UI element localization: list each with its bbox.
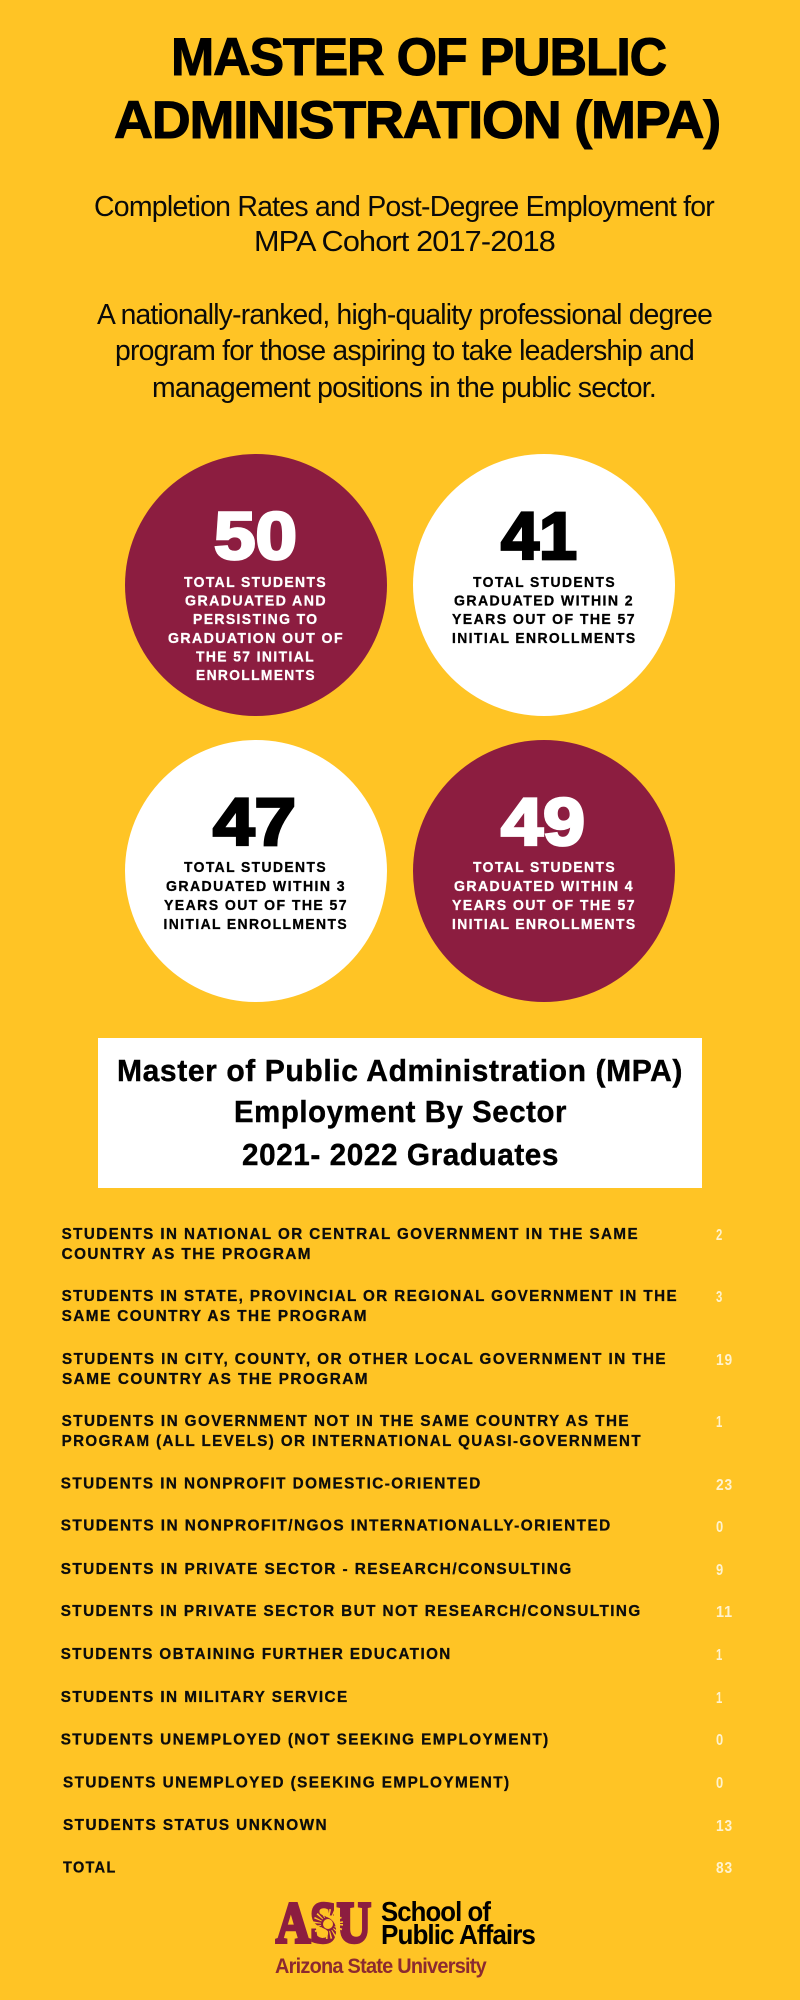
- row: nonprofit domestic: [61, 1476, 733, 1494]
- title: ADMINISTRATION (MPA): [114, 91, 720, 150]
- stat circle: 47 graduated within 3 years: TOTAL STUDENTS: [184, 859, 327, 876]
- program description: program for those aspiring to take leadership and: [115, 335, 694, 367]
- title: MASTER OF PUBLIC: [171, 28, 666, 87]
- stat circle: 50 graduated and persisting: GRADUATION OUT OF: [168, 630, 344, 647]
- employment table: [61, 1226, 733, 1877]
- row: total: TOTAL: [63, 1860, 117, 1876]
- stat circle: 50 graduated and persisting: GRADUATED AND: [185, 592, 327, 610]
- row: nonprofit domestic: 23: [716, 1477, 733, 1494]
- row: non-domestic government: 1: [716, 1414, 723, 1431]
- row: unemployed seeking: 0: [716, 1775, 724, 1792]
- logo: ASU School of Public Affairs: Public Affairs: [381, 1919, 535, 1950]
- panel: employment by sector heading: 2021- 2022 Graduates: [242, 1137, 559, 1172]
- program description: [97, 299, 712, 404]
- row: military: 1: [716, 1690, 723, 1707]
- row: non-domestic government: STUDENTS IN GOVERNMENT NOT IN THE SAME COUNTRY AS THE: [62, 1413, 630, 1430]
- stat circle: 47 graduated within 3 years: GRADUATED WITHIN 3: [166, 878, 346, 895]
- stat circle: 49 graduated within 4 years: [413, 740, 675, 1002]
- logo: ASU School of Public Affairs: [275, 1890, 535, 1978]
- row: state government: STUDENTS IN STATE, PROVINCIAL OR REGIONAL GOVERNMENT IN THE: [62, 1288, 678, 1305]
- row: total: 83: [716, 1860, 733, 1877]
- stat circle: 49 graduated within 4 years: 49: [501, 785, 585, 860]
- row: total: [63, 1860, 733, 1877]
- row: unemployed not seeking: 0: [716, 1732, 724, 1749]
- icon: ASU sunburst wordmark: ASU: [276, 1890, 371, 1955]
- row: national government: 2: [716, 1227, 723, 1244]
- row: national government: COUNTRY AS THE PROGRAM: [62, 1246, 312, 1263]
- stat circle: 47 graduated within 3 years: YEARS OUT OF THE 57: [164, 897, 348, 914]
- stat circle: 41 graduated within 2 years: YEARS OUT OF THE 57: [452, 611, 636, 628]
- row: local government: 19: [716, 1352, 733, 1369]
- row: non-domestic government: [62, 1413, 723, 1450]
- row: further education: 1: [716, 1647, 723, 1664]
- stat circle: 49 graduated within 4 years: GRADUATED WITHIN 4: [454, 878, 634, 895]
- row: local government: SAME COUNTRY AS THE PROGRAM: [62, 1371, 369, 1388]
- row: unemployed seeking: STUDENTS UNEMPLOYED (SEEKING EMPLOYMENT): [63, 1774, 511, 1792]
- subtitle: Completion Rates and Post-Degree Employment for: [94, 191, 715, 223]
- row: unemployed not seeking: STUDENTS UNEMPLOYED (NOT SEEKING EMPLOYMENT): [61, 1732, 550, 1748]
- subtitle: [94, 191, 715, 258]
- row: local government: STUDENTS IN CITY, COUNTY, OR OTHER LOCAL GOVERNMENT IN THE: [62, 1351, 667, 1368]
- row: status unknown: 13: [716, 1818, 733, 1835]
- stat circle: 49 graduated within 4 years: INITIAL ENROLLMENTS: [452, 916, 636, 933]
- stat circle: 50 graduated and persisting: PERSISTING TO: [193, 611, 318, 628]
- row: military: [61, 1689, 723, 1707]
- row: local government: [62, 1351, 733, 1388]
- panel: employment by sector heading: Employment By Sector: [234, 1094, 567, 1129]
- row: nonprofit international: STUDENTS IN NONPROFIT/NGOS INTERNATIONALLY-ORIENTED: [61, 1518, 612, 1534]
- stat circle: 41 graduated within 2 years: GRADUATED WITHIN 2: [454, 592, 634, 610]
- stat circle: 41 graduated within 2 years: INITIAL ENROLLMENTS: [452, 630, 636, 647]
- title: [114, 28, 720, 150]
- row: status unknown: [63, 1817, 733, 1835]
- row: private research: 9: [716, 1562, 724, 1579]
- logo: ASU School of Public Affairs: Arizona State University: [275, 1955, 487, 1978]
- stat circle: 50 graduated and persisting: ENROLLMENTS: [196, 667, 316, 684]
- row: private research: STUDENTS IN PRIVATE SECTOR - RESEARCH/CONSULTING: [61, 1561, 573, 1578]
- row: further education: [61, 1646, 723, 1664]
- row: further education: STUDENTS OBTAINING FURTHER EDUCATION: [61, 1646, 452, 1663]
- panel: employment by sector heading: Master of Public Administration (MPA): [117, 1053, 683, 1088]
- row: national government: [62, 1226, 723, 1263]
- program description: A nationally-ranked, high-quality professional degree: [97, 299, 712, 331]
- stat circle: 50 graduated and persisting: THE 57 INITIAL: [196, 648, 315, 666]
- stat circle: 49 graduated within 4 years: TOTAL STUDENTS: [473, 859, 616, 876]
- stat circle: 47 graduated within 3 years: INITIAL ENROLLMENTS: [164, 916, 348, 933]
- row: non-domestic government: PROGRAM (ALL LEVELS) OR INTERNATIONAL QUASI-GOVERNMENT: [62, 1433, 642, 1450]
- row: private other: 11: [716, 1604, 733, 1621]
- row: nonprofit international: 0: [716, 1519, 724, 1536]
- stat circle: 47 graduated within 3 years: 47: [213, 785, 296, 860]
- stat circle: 50 graduated and persisting: TOTAL STUDENTS: [184, 574, 327, 591]
- stat circle: 47 graduated within 3 years: [125, 740, 387, 1002]
- row: private other: STUDENTS IN PRIVATE SECTOR BUT NOT RESEARCH/CONSULTING: [61, 1603, 642, 1620]
- row: state government: [62, 1288, 723, 1325]
- subtitle: MPA Cohort 2017-2018: [254, 226, 555, 258]
- row: national government: STUDENTS IN NATIONAL OR CENTRAL GOVERNMENT IN THE SAME: [62, 1226, 639, 1243]
- row: status unknown: STUDENTS STATUS UNKNOWN: [63, 1817, 328, 1834]
- stat circle: 50 graduated and persisting: 50: [214, 499, 297, 574]
- stat circle: 50 graduated and persisting: [125, 454, 387, 716]
- stat circle: 41 graduated within 2 years: [413, 454, 675, 716]
- row: state government: 3: [716, 1289, 723, 1306]
- logo: ASU School of Public Affairs: School of: [381, 1896, 492, 1927]
- row: military: STUDENTS IN MILITARY SERVICE: [61, 1689, 349, 1706]
- stat circle: 49 graduated within 4 years: YEARS OUT OF THE 57: [452, 897, 636, 914]
- stat circle: 41 graduated within 2 years: TOTAL STUDENTS: [473, 574, 616, 591]
- row: state government: SAME COUNTRY AS THE PROGRAM: [62, 1308, 368, 1325]
- stat circle: 41 graduated within 2 years: 41: [501, 499, 577, 574]
- program description: management positions in the public sector.: [152, 372, 656, 404]
- row: unemployed seeking: [63, 1774, 724, 1792]
- row: nonprofit domestic: STUDENTS IN NONPROFIT DOMESTIC-ORIENTED: [61, 1476, 482, 1492]
- panel: employment by sector heading: [98, 1038, 702, 1188]
